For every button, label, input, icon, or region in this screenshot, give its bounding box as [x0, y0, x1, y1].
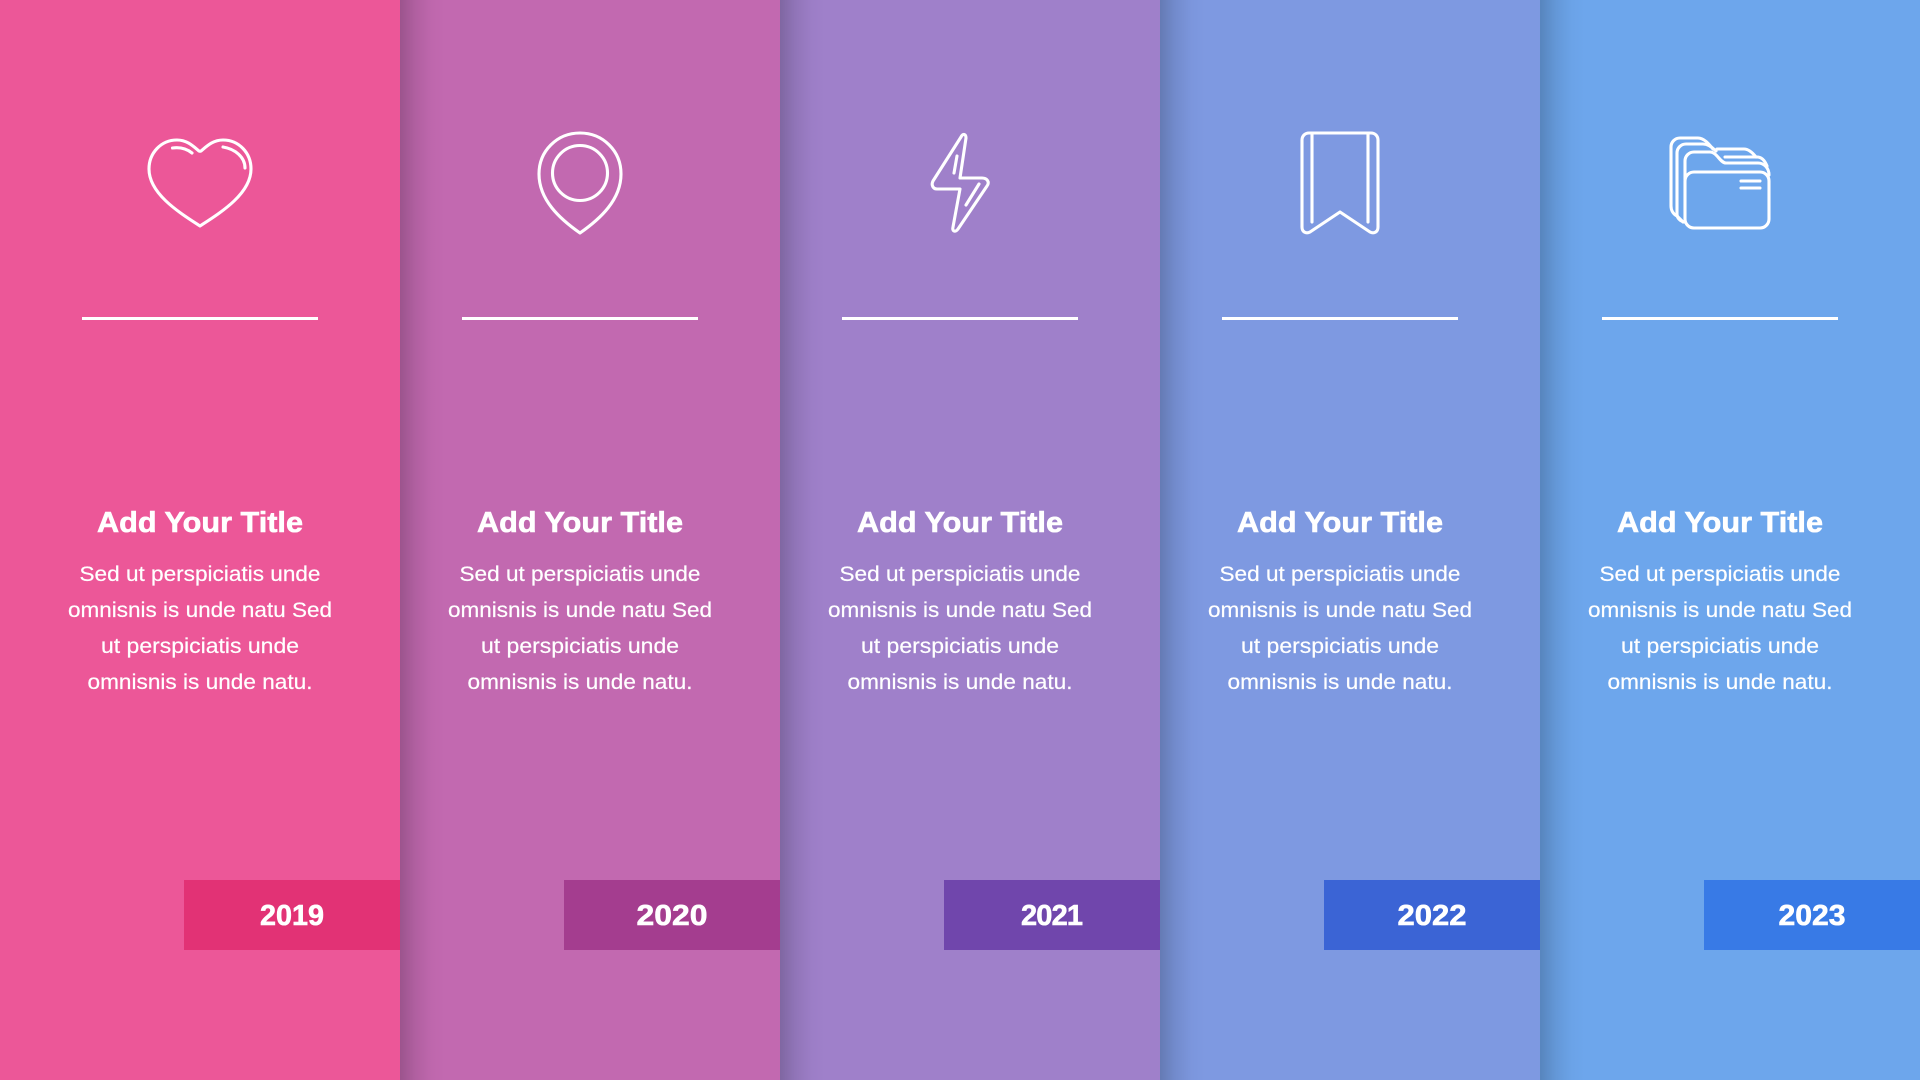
year badge: 2020 [636, 900, 708, 932]
body text: Sed ut perspiciatis unde [80, 562, 320, 586]
icon: map pin [539, 133, 621, 233]
body text: omnisnis is unde natu. [848, 670, 1072, 694]
body text: omnisnis is unde natu Sed [1588, 598, 1852, 622]
body text: omnisnis is unde natu Sed [448, 598, 712, 622]
body text: omnisnis is unde natu. [88, 670, 312, 694]
divider line [1222, 317, 1458, 320]
body text: omnisnis is unde natu Sed [68, 598, 332, 622]
panel: 2022 [1160, 0, 1540, 1080]
heading: Add Your Title [477, 507, 683, 539]
year badge [1324, 880, 1540, 950]
year badge: 2022 [1398, 900, 1466, 932]
year badge: 2023 [1778, 900, 1846, 932]
divider line [1602, 317, 1838, 320]
heading: Add Your Title [1617, 507, 1823, 539]
body text: ut perspiciatis unde [481, 634, 679, 658]
body text: Sed ut perspiciatis unde [1220, 562, 1460, 586]
year badge: 2019 [260, 900, 324, 932]
body text: ut perspiciatis unde [861, 634, 1059, 658]
year badge: 2021 [1021, 900, 1083, 932]
panel: 2020 [400, 0, 780, 1080]
body text: Sed ut perspiciatis unde [460, 562, 700, 586]
body text: ut perspiciatis unde [101, 634, 299, 658]
body text [828, 562, 1092, 694]
body text: ut perspiciatis unde [1621, 634, 1819, 658]
divider line [82, 317, 318, 320]
body text: omnisnis is unde natu. [1228, 670, 1452, 694]
year badge [1704, 880, 1920, 950]
panel: 2023 [1540, 0, 1920, 1080]
icon: folders [1671, 138, 1769, 228]
body text: Sed ut perspiciatis unde [1600, 562, 1840, 586]
divider line [842, 317, 1078, 320]
icon: heart [149, 140, 251, 226]
body text: omnisnis is unde natu Sed [1208, 598, 1472, 622]
body text: omnisnis is unde natu Sed [828, 598, 1092, 622]
body text [1208, 562, 1472, 694]
divider line [462, 317, 698, 320]
icon: bookmark [1302, 133, 1378, 233]
body text [1588, 562, 1852, 694]
heading: Add Your Title [1237, 507, 1443, 539]
body text [68, 562, 332, 694]
panel: 2021 [780, 0, 1160, 1080]
year badge [944, 880, 1160, 950]
year badge [184, 880, 400, 950]
heading: Add Your Title [97, 507, 303, 539]
body text: Sed ut perspiciatis unde [840, 562, 1080, 586]
icon: lightning bolt [932, 134, 988, 231]
body text [448, 562, 712, 694]
year badge [564, 880, 780, 950]
body text: omnisnis is unde natu. [468, 670, 692, 694]
body text: ut perspiciatis unde [1241, 634, 1439, 658]
heading: Add Your Title [857, 507, 1063, 539]
body text: omnisnis is unde natu. [1608, 670, 1832, 694]
panel: 2019 [0, 0, 400, 1080]
